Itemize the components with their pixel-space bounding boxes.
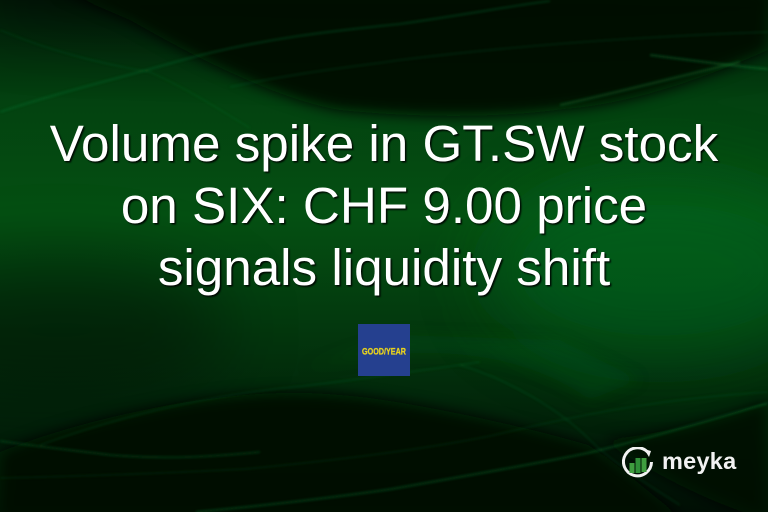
title: on SIX: CHF 9.00 price bbox=[121, 177, 647, 234]
brand: meyka logo bbox=[622, 447, 736, 478]
icon: meyka chart ring bbox=[622, 447, 653, 478]
icon: Goodyear logo bbox=[358, 324, 410, 376]
bottom dark swoosh bbox=[0, 393, 686, 512]
title bbox=[50, 115, 720, 298]
title: signals liquidity shift bbox=[158, 239, 610, 296]
title: Volume spike in GT.SW stock bbox=[50, 115, 718, 172]
brand name: meyka bbox=[662, 448, 736, 474]
top dark swoosh bbox=[60, 0, 768, 116]
